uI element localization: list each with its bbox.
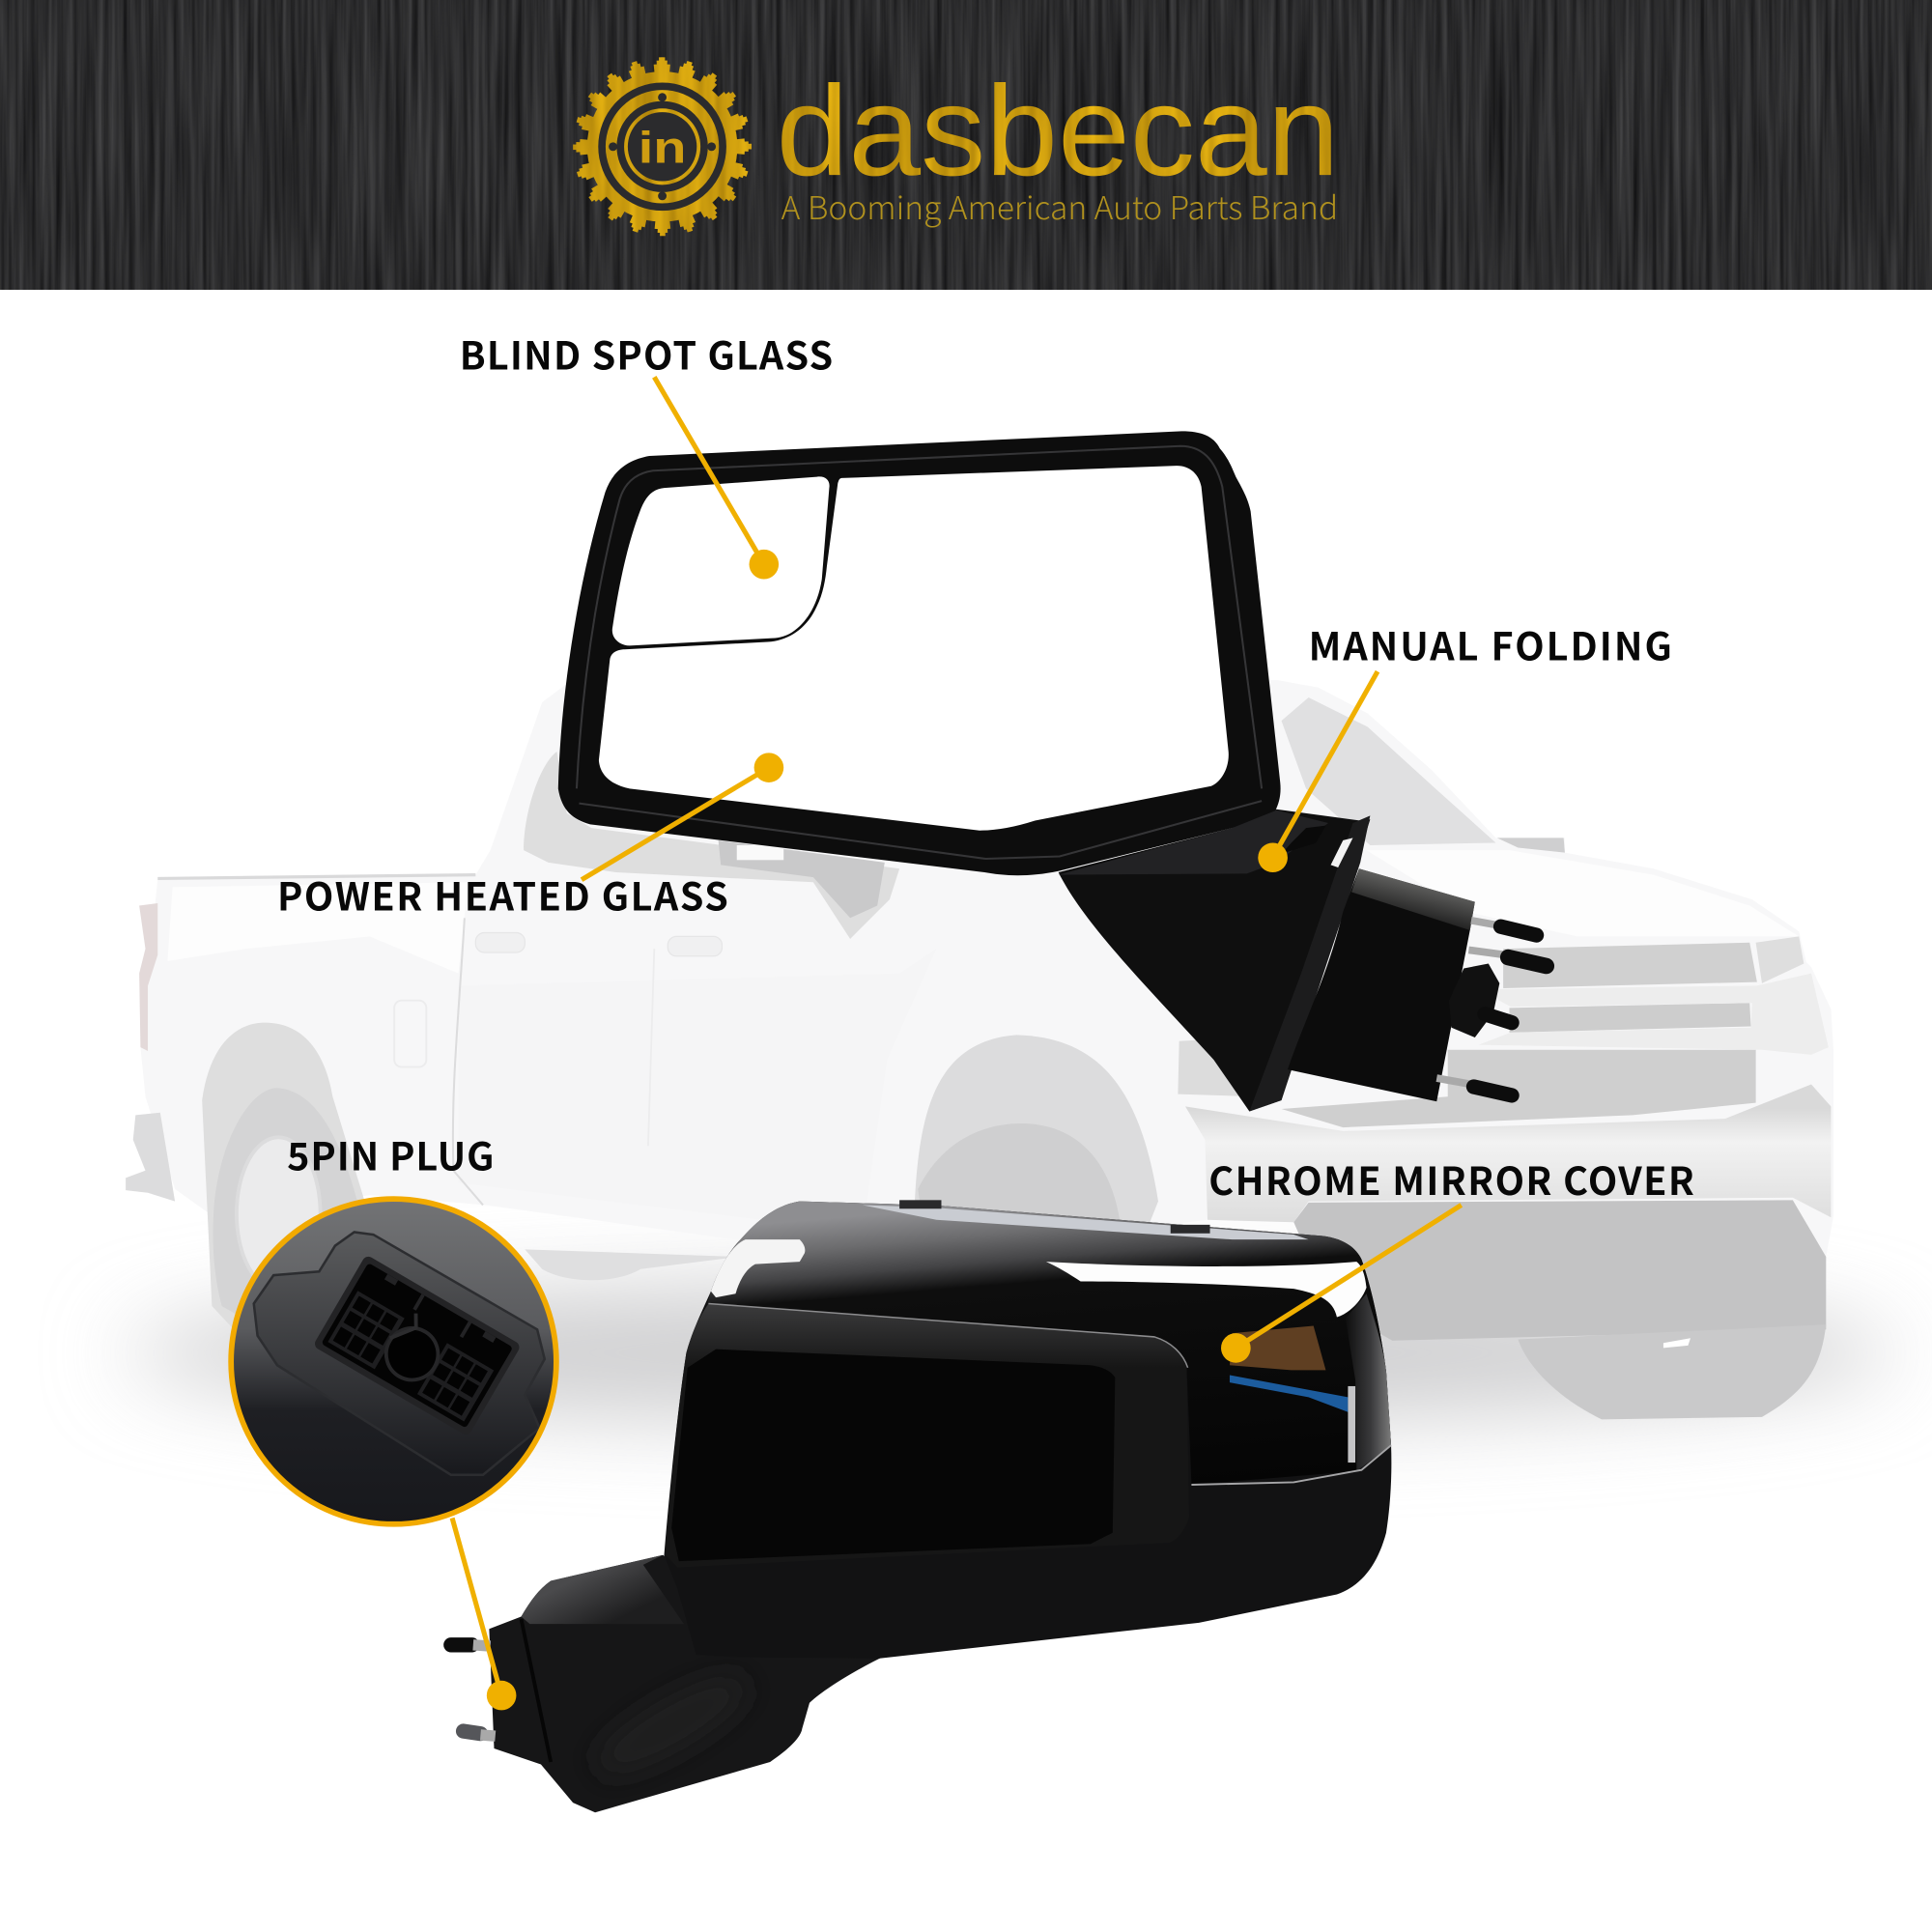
icon: gear emblem bbox=[576, 60, 750, 234]
main heated glass bbox=[599, 466, 1229, 831]
brand name: dasbecan bbox=[777, 60, 1339, 203]
vertical chrome streak bbox=[1348, 1386, 1355, 1463]
left fog block bbox=[1178, 1037, 1257, 1096]
inset background bbox=[231, 1199, 556, 1524]
rear bolt bottom bbox=[464, 1731, 496, 1736]
emblem rings bbox=[602, 86, 723, 207]
frame edge highlight bbox=[577, 446, 1262, 859]
rear window under mirror bbox=[524, 752, 899, 939]
rear tyre bbox=[213, 1088, 365, 1331]
faded pickup truck bbox=[126, 680, 1833, 1419]
arm seam bbox=[522, 1619, 551, 1762]
chrome top edge bbox=[863, 1205, 1309, 1239]
chrome cap bbox=[706, 1202, 1391, 1485]
chrome bars bbox=[1479, 974, 1829, 1055]
cap top slot 2 bbox=[1171, 1225, 1210, 1234]
cap top slot 1 bbox=[899, 1200, 941, 1208]
right pin grid bbox=[417, 1343, 494, 1421]
header band with dark wood texture bbox=[0, 0, 1932, 290]
callout line: power heated glass bbox=[582, 753, 783, 880]
mounting bolt 3 bbox=[1436, 1078, 1512, 1095]
label: manual folding: MANUAL FOLDING bbox=[1309, 617, 1672, 672]
chrome highlight right bbox=[1046, 1262, 1367, 1318]
inset: 5 pin plug close-up bbox=[231, 1199, 556, 1524]
flange gap bbox=[1331, 838, 1353, 867]
brand logo bbox=[576, 60, 1339, 234]
label: power heated glass: POWER HEATED GLASS bbox=[277, 867, 728, 923]
door handles bbox=[475, 933, 722, 956]
rear rim bbox=[237, 1137, 321, 1290]
window glint bbox=[737, 845, 783, 860]
door seam bbox=[453, 918, 483, 1205]
tagline: A Booming American Auto Parts Brand bbox=[781, 183, 1338, 229]
right chrome edge bbox=[1346, 1293, 1391, 1471]
emblem letters: in bbox=[639, 122, 686, 172]
arm upper lip bbox=[1059, 809, 1328, 875]
lower bumper bbox=[1293, 1200, 1826, 1341]
front tyre bbox=[918, 1123, 1122, 1233]
centre latch bbox=[384, 1314, 440, 1381]
upper bumper bbox=[1185, 1084, 1831, 1222]
door shading bbox=[458, 949, 936, 1233]
callout line: chrome mirror cover bbox=[1221, 1205, 1462, 1363]
upper mirror: glass side bbox=[558, 431, 1547, 1112]
textured back panel bbox=[666, 1303, 1189, 1567]
panel dark centre bbox=[671, 1350, 1115, 1561]
flange bbox=[1249, 815, 1370, 1112]
left pin grid bbox=[327, 1291, 405, 1369]
rear step bumper bbox=[126, 1113, 175, 1202]
front wheel arch bbox=[914, 1035, 1158, 1233]
rear door seam bbox=[648, 949, 654, 1146]
arm top face bbox=[522, 1555, 684, 1624]
inset ring bbox=[231, 1199, 556, 1524]
tyre glint bbox=[1663, 1338, 1690, 1348]
cylinder highlight bbox=[1351, 868, 1475, 930]
callout line: blind spot glass bbox=[654, 377, 779, 579]
bed top rail bbox=[157, 875, 475, 878]
step under door bbox=[525, 1249, 739, 1280]
front tyre right bbox=[1518, 1324, 1826, 1419]
connector plug bbox=[1449, 963, 1512, 1037]
mirror arm bbox=[1059, 809, 1370, 1112]
windshield bbox=[1282, 697, 1495, 845]
top keys bbox=[384, 1274, 497, 1343]
callout leader lines and dots bbox=[452, 377, 1462, 1710]
chrome lower edge bbox=[1191, 1445, 1391, 1485]
lower mirror: rear side bbox=[451, 1200, 1391, 1812]
mirror frame bbox=[558, 431, 1281, 875]
mirror shell bbox=[665, 1202, 1391, 1659]
mounting bolt 1 bbox=[1471, 921, 1537, 935]
label: blind spot glass: BLIND SPOT GLASS bbox=[460, 327, 833, 382]
hood shading bbox=[1367, 850, 1799, 936]
window darker pane bbox=[719, 840, 885, 918]
panel edge glint bbox=[708, 1303, 1188, 1368]
arm soft highlight bbox=[585, 1662, 757, 1787]
label: chrome mirror cover: CHROME MIRROR COVER bbox=[1208, 1151, 1694, 1207]
grille top band bbox=[1503, 943, 1757, 988]
floor shadow bbox=[124, 1282, 1897, 1424]
white cab top over the mirror area bbox=[167, 882, 469, 974]
fuel door bbox=[394, 1001, 426, 1067]
connector socket bbox=[313, 1255, 522, 1436]
arm notch bbox=[1282, 826, 1325, 854]
truck body bbox=[140, 680, 1833, 1257]
callout line: 5 pin plug bbox=[452, 1518, 516, 1710]
headlight bbox=[1756, 936, 1804, 983]
cap reflection: cardboard bbox=[1230, 1325, 1325, 1370]
rear bolt top bbox=[451, 1645, 491, 1646]
chrome highlight left bbox=[711, 1239, 805, 1297]
motor cylinder bbox=[1288, 868, 1475, 1101]
grille middle band bbox=[1509, 1003, 1750, 1033]
label: 5 pin plug: 5PIN PLUG bbox=[287, 1127, 494, 1182]
connector housing bbox=[254, 1233, 545, 1475]
tail light bbox=[139, 903, 157, 1051]
blind spot glass bbox=[612, 476, 830, 645]
lower mirror arm bbox=[489, 1555, 887, 1812]
truck mirror bbox=[1497, 838, 1565, 853]
cap reflection: blue strip bbox=[1230, 1375, 1348, 1412]
rear wheel arch bbox=[202, 1023, 370, 1343]
mounting bolt 2 bbox=[1468, 950, 1547, 966]
callout line: manual folding bbox=[1258, 671, 1378, 872]
grille lower band bbox=[1282, 1050, 1756, 1127]
